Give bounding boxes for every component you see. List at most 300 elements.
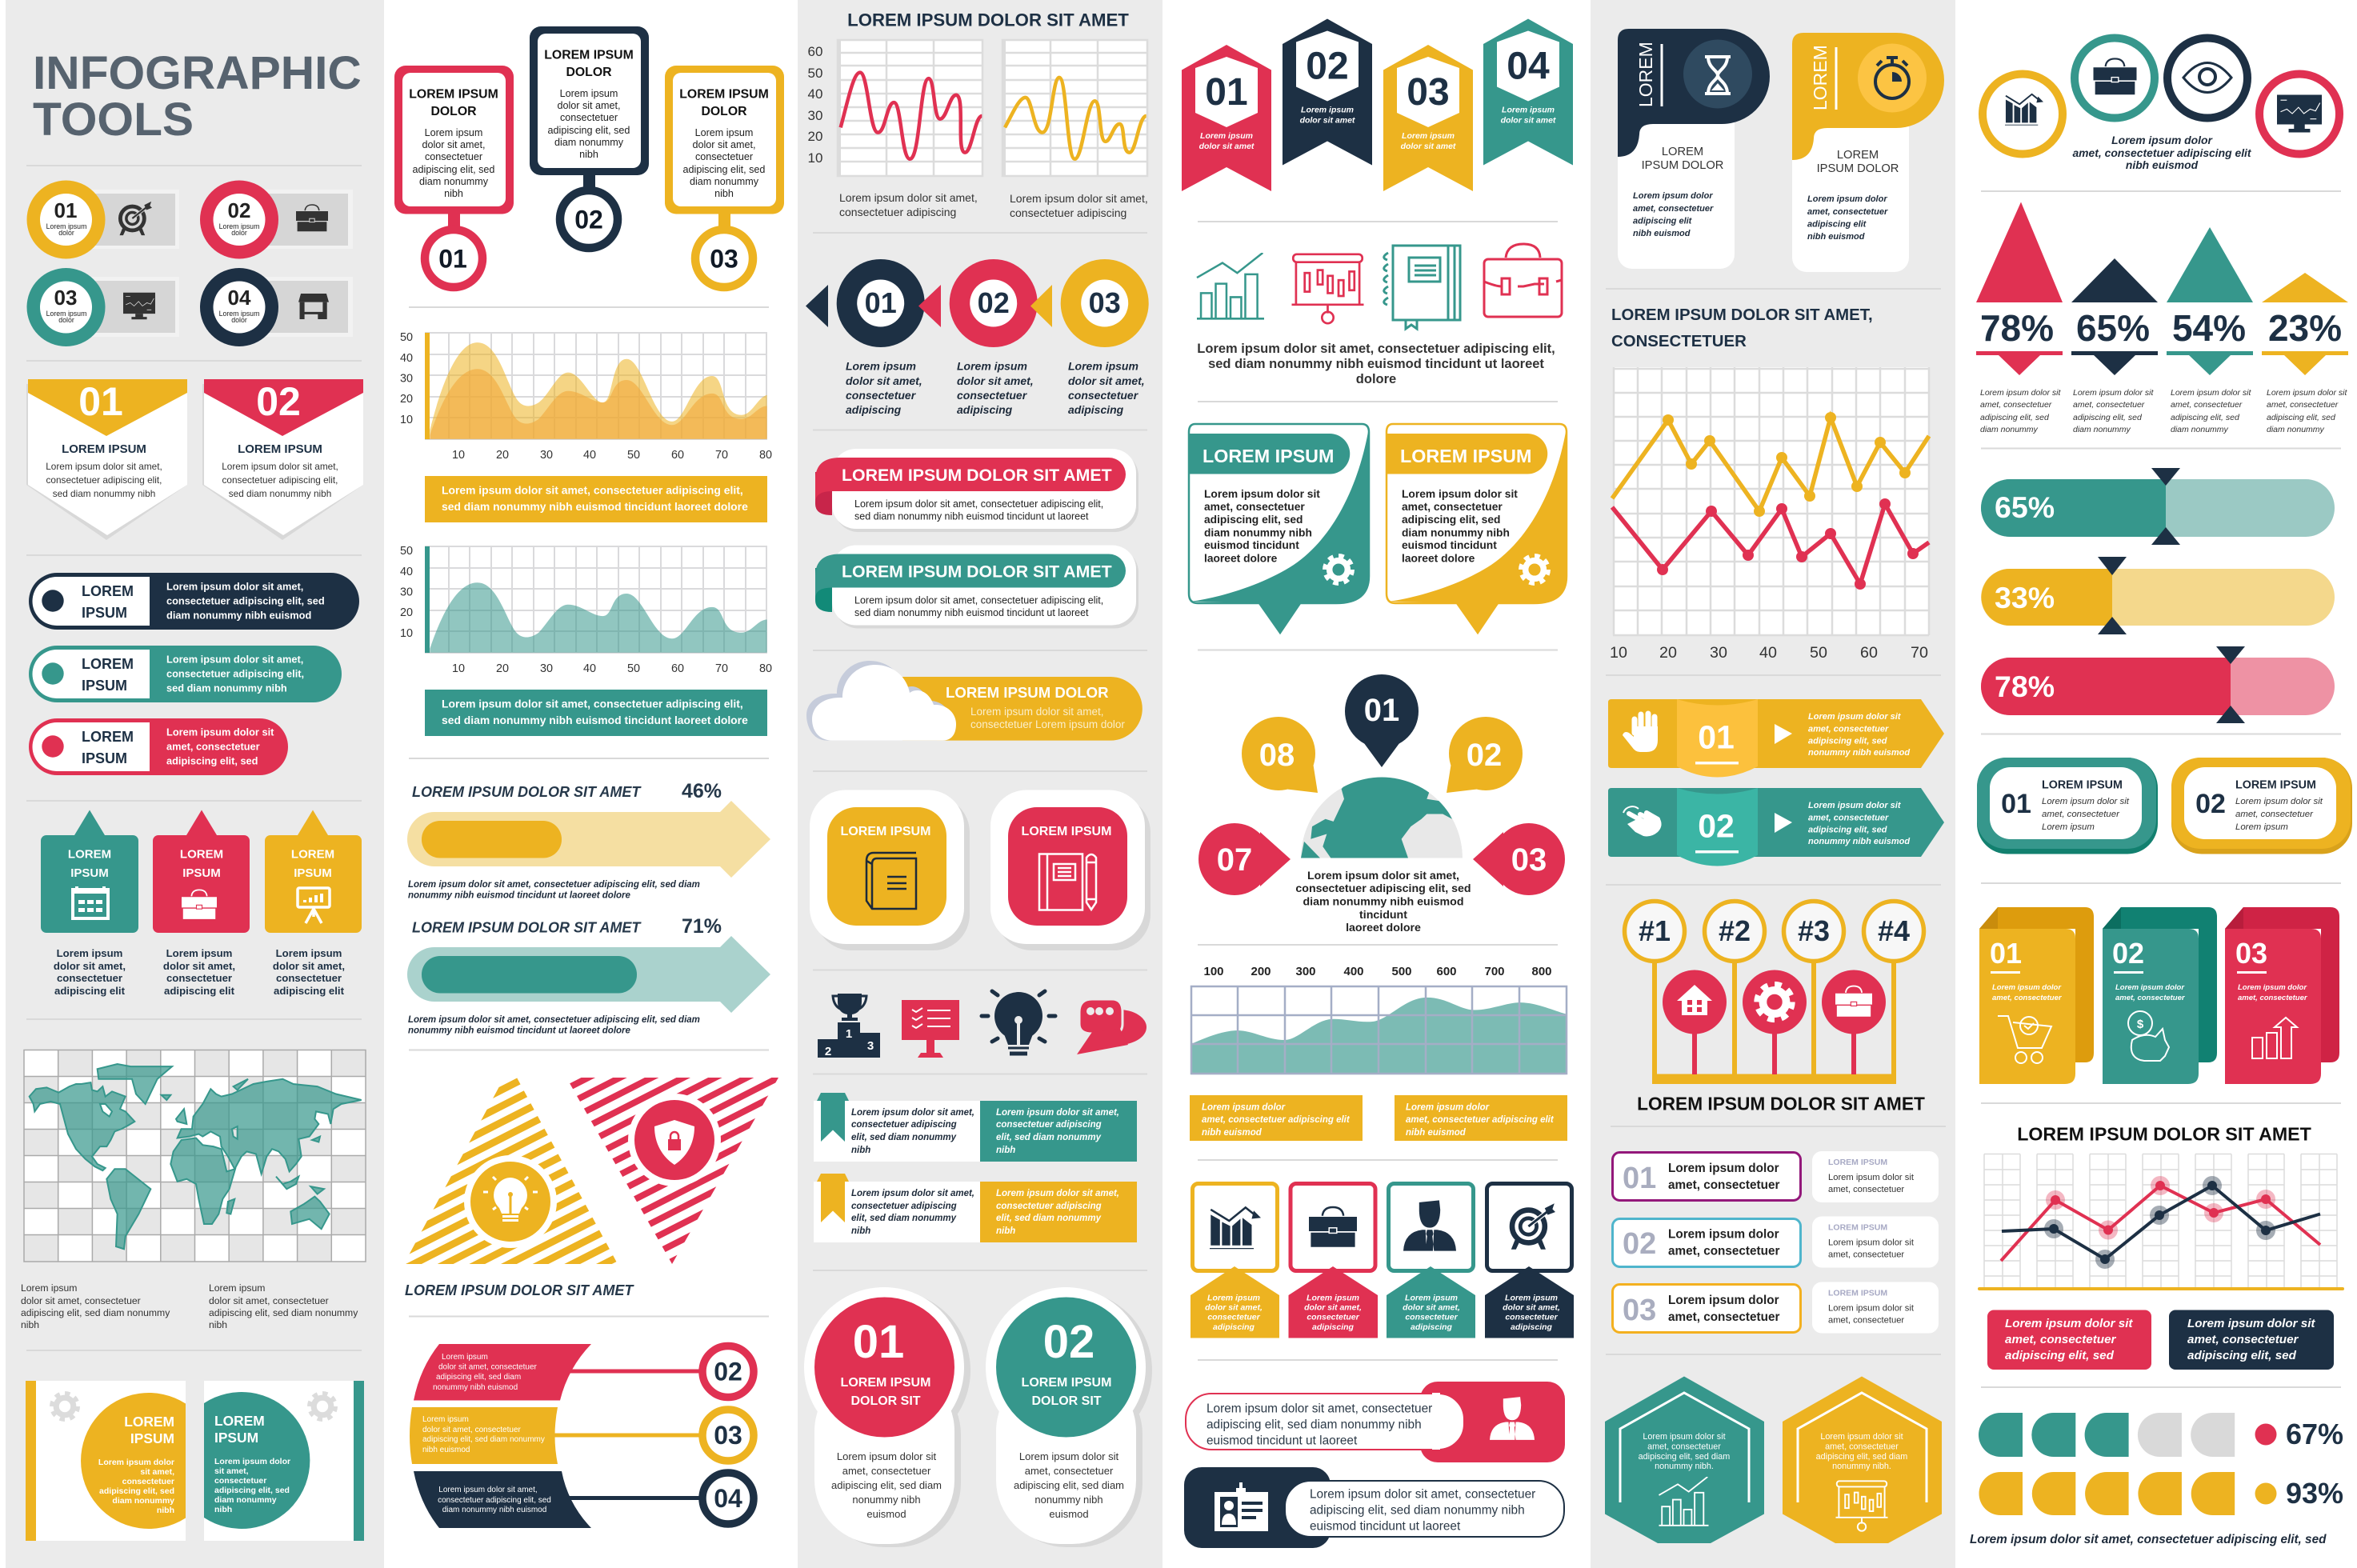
tag card teal: Lorem ipsum <box>57 947 122 959</box>
bookmark row teal: elit, sed diam nonummy <box>996 1133 1102 1142</box>
icon row paragraph: dolore <box>1356 372 1396 386</box>
list row 02 <box>1613 1216 1939 1267</box>
ribbon card teal: LOREM IPSUM DOLOR SIT AMET <box>842 562 1112 581</box>
area chart gold: 50 <box>400 331 413 344</box>
icon: gear <box>310 1394 335 1419</box>
tag card teal: adipiscing elit <box>54 985 126 997</box>
round badge card 02: amet, consectetuer <box>1025 1465 1114 1477</box>
pin card 03: diam nonummy <box>690 176 759 187</box>
folder card red: amet, consectetuer <box>2238 994 2308 1002</box>
hexagon gold: Lorem ipsum dolor sit <box>1820 1432 1903 1442</box>
shield card 02: Lorem ipsum dolor sit amet, <box>222 461 338 472</box>
bookmark row gold: nibh <box>851 1226 870 1236</box>
map caption left: Lorem ipsum <box>21 1282 77 1294</box>
pin card 03: consectetuer <box>695 151 753 162</box>
icon: growth bars <box>2252 1018 2297 1058</box>
pill navy: IPSUM <box>82 605 127 621</box>
speech box gold: euismod tincidunt <box>1402 539 1497 551</box>
area chart teal: 20 <box>400 606 413 619</box>
round badge card 01: amet, consectetuer <box>842 1465 931 1477</box>
badge 04 <box>702 1473 754 1524</box>
line chart red <box>837 39 983 177</box>
pictogram row 67% <box>1979 1413 2343 1457</box>
icon card teal: adipiscing <box>1411 1322 1453 1332</box>
tag card gold: dolor sit amet, <box>273 960 345 972</box>
hexagon teal: adipiscing elit, sed diam <box>1639 1452 1730 1462</box>
badge 02: 02 <box>714 1357 742 1386</box>
y axis labels: 30 <box>808 108 822 123</box>
icon card navy: dolor sit amet, <box>1503 1302 1560 1312</box>
numbered circle tag 02 <box>200 181 353 259</box>
icon: bars <box>1659 1477 1709 1526</box>
cloud banner: LOREM IPSUM DOLOR <box>946 684 1109 701</box>
icon: id card <box>1215 1482 1268 1531</box>
round badge card 02 <box>986 1287 1152 1547</box>
step circle 02 <box>918 259 1038 347</box>
icon: shop <box>298 294 329 319</box>
pill navy: diam nonummy nibh euismod <box>166 610 311 621</box>
arrow strip gold: nonummy nibh euismod <box>1808 748 1910 758</box>
striped triangle gold with bulb <box>404 1078 618 1264</box>
dual series grid chart <box>1978 1154 2344 1290</box>
line chart gold <box>1002 39 1148 177</box>
pin card 01: 01 <box>438 245 467 274</box>
icon: briefcase <box>182 890 217 919</box>
timer card gold: adipiscing elit <box>1807 219 1867 229</box>
speech box teal: amet, consectetuer <box>1204 501 1305 513</box>
circle card gold <box>26 1381 186 1541</box>
hexagon gold: amet, consectetuer <box>1825 1442 1899 1451</box>
arrow progress 71%: nonummy nibh euismod tincidunt ut laoreet dolore <box>408 1026 631 1035</box>
icon: trophy podium: 2 <box>825 1045 831 1058</box>
timer card navy: Lorem ipsum dolor <box>1633 191 1713 201</box>
list row 01: amet, consectetuer <box>1828 1185 1904 1194</box>
icon tile red: LOREM IPSUM <box>1022 825 1111 838</box>
circle card teal: diam nonummy <box>214 1495 277 1505</box>
tag card teal: LOREM <box>68 848 111 861</box>
speech box teal: LOREM IPSUM <box>1203 446 1334 466</box>
percent stat 65: adipiscing elit, sed <box>2073 413 2143 422</box>
icon: target <box>120 202 152 235</box>
map land masses <box>30 1064 362 1249</box>
icon: trophy podium: 1 <box>846 1027 852 1041</box>
cloud banner: Lorem ipsum dolor sit amet, <box>970 706 1104 718</box>
hash #4: #4 <box>1878 914 1910 947</box>
area chart gold: 10 <box>400 414 413 426</box>
double line chart: 30 <box>1710 644 1727 662</box>
list row 02: LOREM IPSUM <box>1828 1222 1887 1232</box>
percent stat 78: adipiscing elit, sed <box>1980 413 2050 422</box>
note red: adipiscing elit, sed <box>2005 1349 2115 1362</box>
numbered circle tag 04: Lorem ipsum <box>219 310 259 318</box>
column 6 <box>1970 38 2352 1546</box>
area chart gold: 10 <box>452 449 465 462</box>
percent stat 78: Lorem ipsum dolor sit <box>1980 388 2061 398</box>
pin 02 <box>1447 717 1523 793</box>
pill teal <box>29 646 342 702</box>
list row 03: Lorem ipsum dolor <box>1668 1294 1779 1307</box>
pin card 02: dolor sit amet, <box>557 100 621 111</box>
pin card 02: LOREM IPSUM <box>544 48 634 62</box>
percent stat 54: diam nonummy <box>2171 425 2229 434</box>
hexagon ribbon 01: Lorem ipsum <box>1200 131 1253 141</box>
note red <box>1987 1310 2151 1370</box>
caption box left: amet, consectetuer adipiscing elit <box>1202 1115 1351 1125</box>
timer card gold <box>1792 33 1944 272</box>
speech box gold: diam nonummy nibh <box>1402 526 1510 539</box>
numbered circle tag 03 <box>27 268 179 346</box>
pin 07: 07 <box>1217 842 1252 878</box>
timer card navy: nibh euismod <box>1633 229 1691 238</box>
list row 03: amet, consectetuer <box>1828 1315 1904 1325</box>
tree heading: LOREM IPSUM DOLOR SIT AMET <box>1637 1093 1925 1114</box>
pin 03 <box>1473 823 1565 895</box>
bookmark row gold: elit, sed diam nonummy <box>851 1214 957 1223</box>
circle card teal: sit amet, <box>214 1466 249 1476</box>
map caption left: dolor sit amet, consectetuer <box>21 1295 141 1306</box>
shield card 02: consectetuer adipiscing elit, <box>222 474 338 486</box>
list row 01: LOREM IPSUM <box>1828 1158 1887 1167</box>
segment navy: Lorem ipsum dolor sit amet, <box>438 1486 538 1494</box>
numbered circle tag 04: dolor <box>231 316 247 324</box>
round badge card 01: LOREM IPSUM <box>841 1376 930 1390</box>
globe caption: consectetuer adipiscing elit, sed <box>1295 882 1471 895</box>
quote card red <box>1186 1382 1565 1462</box>
area chart teal: 80 <box>759 662 772 675</box>
shield card 01: LOREM IPSUM <box>62 442 146 456</box>
timer card gold: amet, consectetuer <box>1807 207 1888 217</box>
list row 01: Lorem ipsum dolor <box>1668 1162 1779 1175</box>
quote card navy: euismod tincidunt ut laoreet <box>1310 1520 1461 1533</box>
area chart teal: 70 <box>715 662 728 675</box>
numbered circle tag 04: 04 <box>228 286 251 310</box>
pin card 03: dolor sit amet, <box>692 139 756 150</box>
quote card navy: adipiscing elit, sed diam nonummy nibh <box>1310 1504 1525 1517</box>
timer card navy: LOREM <box>1635 42 1656 107</box>
icon card gold: Lorem ipsum <box>1207 1293 1260 1302</box>
rounded box teal <box>1977 758 2158 854</box>
quote card red: euismod tincidunt ut laoreet <box>1207 1434 1358 1448</box>
globe caption: diam nonummy nibh euismod <box>1303 896 1464 909</box>
pin card 03: adipiscing elit, sed <box>683 164 765 175</box>
list row 01: Lorem ipsum dolor sit <box>1828 1173 1915 1182</box>
heading: LOREM IPSUM DOLOR SIT AMET <box>847 10 1129 30</box>
map caption right: Lorem ipsum <box>209 1282 265 1294</box>
segment red: dolor sit amet, consectetuer <box>438 1363 538 1371</box>
numbered circle tag 01 <box>27 181 179 259</box>
pin card 03: Lorem ipsum <box>695 127 753 138</box>
icon card gold <box>1191 1184 1279 1338</box>
pin card 03 <box>665 66 784 287</box>
icon card gold: dolor sit amet, <box>1205 1302 1263 1312</box>
speech box gold: laoreet dolore <box>1402 552 1475 565</box>
icon ring red monitor <box>2259 74 2339 154</box>
area chart gold: 20 <box>496 449 509 462</box>
caption bar gold <box>425 476 767 522</box>
speech box gold: amet, consectetuer <box>1402 501 1503 513</box>
arrow progress 46%: LOREM IPSUM DOLOR SIT AMET <box>412 784 642 800</box>
hash #4 <box>1864 901 1923 962</box>
hexagon teal: Lorem ipsum dolor sit <box>1643 1432 1726 1442</box>
area chart wide: 200 <box>1251 965 1271 978</box>
icon: line notebook <box>1384 246 1460 329</box>
area chart teal: 40 <box>400 566 413 578</box>
circle card gold: Lorem ipsum dolor <box>98 1458 174 1467</box>
folder card gold: Lorem ipsum dolor <box>1992 983 2062 992</box>
tag card teal: dolor sit amet, <box>54 960 126 972</box>
circle card gold: IPSUM <box>130 1430 174 1446</box>
hash #1 <box>1624 901 1685 962</box>
column 2 <box>394 26 784 1528</box>
arrow strip teal: amet, consectetuer <box>1808 813 1889 822</box>
hexagon ribbon 03 <box>1383 45 1473 191</box>
pin 08: 08 <box>1259 738 1295 773</box>
icon card teal: Lorem ipsum <box>1405 1293 1458 1302</box>
area chart gold: 80 <box>759 449 772 462</box>
map caption right: adipiscing elit, sed diam nonummy <box>209 1307 358 1318</box>
navy series <box>2002 1176 2320 1269</box>
quote card navy <box>1184 1467 1564 1548</box>
hash #2: #2 <box>1719 914 1751 947</box>
list row 01: 01 <box>1623 1162 1656 1195</box>
icon card red <box>1288 1184 1378 1338</box>
step captions: Lorem ipsum <box>846 360 916 373</box>
icon tile gold: LOREM IPSUM <box>841 825 930 838</box>
cloud banner: consectetuer Lorem ipsum dolor <box>970 718 1125 730</box>
ribbon card red <box>815 449 1138 532</box>
pin card 03: LOREM IPSUM <box>679 88 769 101</box>
bookmark row gold: elit, sed diam nonummy <box>996 1214 1102 1223</box>
arrow strip gold: adipiscing elit, sed <box>1808 736 1887 746</box>
tag card red: dolor sit amet, <box>163 960 235 972</box>
bookmark row teal: Lorem ipsum dolor sit amet, <box>996 1108 1119 1118</box>
area chart teal: 50 <box>400 545 413 558</box>
pin card 01: LOREM IPSUM <box>409 88 498 101</box>
speech box teal: laoreet dolore <box>1204 552 1278 565</box>
pictogram row 67%: 67% <box>2286 1418 2343 1450</box>
round badge card 02: adipiscing elit, sed diam <box>1014 1479 1124 1491</box>
round badge card 01: DOLOR SIT <box>850 1394 921 1408</box>
round badge card 01: adipiscing elit, sed diam <box>831 1479 942 1491</box>
pin card 02: diam nonummy <box>554 137 624 148</box>
arrow progress 46%: Lorem ipsum dolor sit amet, consectetuer adipiscing elit, sed diam <box>408 880 700 890</box>
progress bar 78%: 78% <box>1995 670 2055 703</box>
shield card 01: sed diam nonummy nibh <box>53 488 155 499</box>
speech box teal: diam nonummy nibh <box>1204 526 1312 539</box>
pin card 02: consectetuer <box>560 112 618 123</box>
hexagon ribbon 01 <box>1182 45 1271 191</box>
note navy: adipiscing elit, sed <box>2187 1349 2297 1362</box>
heading: LOREM IPSUM DOLOR SIT AMET, <box>1611 306 1873 324</box>
ribbon card teal <box>815 546 1138 629</box>
icon: gear <box>1325 556 1352 583</box>
badge 02 <box>702 1346 754 1397</box>
percent stat 23: Lorem ipsum dolor sit <box>2267 388 2347 398</box>
icon card teal <box>1387 1184 1475 1338</box>
list row 01 <box>1613 1151 1939 1202</box>
folder card red <box>2225 907 2339 1084</box>
segment red: adipiscing elit, sed diam <box>436 1373 521 1382</box>
area chart teal <box>400 545 772 675</box>
numbered circle tag 04 <box>200 268 353 346</box>
pill teal: IPSUM <box>82 678 127 694</box>
chart captions: consectetuer adipiscing <box>839 206 956 218</box>
y axis labels: 50 <box>808 66 822 81</box>
pin card 03: nibh <box>714 188 734 199</box>
area chart teal: 40 <box>583 662 596 675</box>
step captions: dolor sit amet, <box>846 374 922 387</box>
pictogram row 93% <box>1979 1472 2343 1515</box>
hexagon gold: adipiscing elit, sed diam <box>1816 1452 1907 1462</box>
step captions: dolor sit amet, <box>1068 374 1145 387</box>
rounded box gold: LOREM IPSUM <box>2235 779 2316 792</box>
rounded box teal: Lorem ipsum <box>2042 822 2095 832</box>
icon: presentation <box>298 888 330 923</box>
column 3 <box>804 10 1152 1547</box>
area chart teal: 20 <box>496 662 509 675</box>
area chart teal: 10 <box>452 662 465 675</box>
tag card red <box>153 810 250 997</box>
pictogram row 93%: 93% <box>2286 1477 2343 1510</box>
rounded box teal: Lorem ipsum dolor sit <box>2042 797 2130 806</box>
rounded box gold: Lorem ipsum dolor sit <box>2235 797 2323 806</box>
step captions: Lorem ipsum <box>1068 360 1138 373</box>
shield card 02: LOREM IPSUM <box>238 442 322 456</box>
rounded box teal: 01 <box>2001 789 2031 819</box>
numbered circle tag 01: dolor <box>58 229 74 237</box>
round badge card 01: nonummy nibh <box>852 1494 921 1506</box>
tag card teal: consectetuer <box>57 972 122 984</box>
area chart teal: 30 <box>540 662 553 675</box>
round badge card 02: DOLOR SIT <box>1031 1394 1102 1408</box>
circle card gold: diam nonummy <box>112 1496 174 1506</box>
area chart gold: 30 <box>400 373 413 386</box>
segment gold: nibh euismod <box>422 1446 470 1454</box>
area chart wide <box>1191 965 1567 1074</box>
numbered circle tag 03: 03 <box>54 286 77 310</box>
step circle 03: 03 <box>1089 286 1121 319</box>
icon row paragraph: Lorem ipsum dolor sit amet, consectetuer adipiscing elit, <box>1197 342 1555 356</box>
tag card teal <box>41 810 138 997</box>
pill red: LOREM <box>82 729 134 745</box>
progress bar 78% <box>1981 646 2335 723</box>
caption bar gold: sed diam nonummy nibh euismod tincidunt laoreet dolore <box>442 500 748 513</box>
globe caption: laoreet dolore <box>1346 922 1421 934</box>
icon card navy: Lorem ipsum <box>1505 1293 1558 1302</box>
arrow progress 71%: LOREM IPSUM DOLOR SIT AMET <box>412 920 642 936</box>
icon tile gold <box>810 790 970 950</box>
area chart gold: 40 <box>400 352 413 365</box>
icon: house <box>1663 970 1727 1034</box>
numbered circle tag 02: Lorem ipsum <box>219 222 259 230</box>
step captions: adipiscing <box>957 403 1013 416</box>
pin 01: 01 <box>1364 693 1399 728</box>
heading: CONSECTETUER <box>1611 333 1747 350</box>
arrow progress 46%: nonummy nibh euismod tincidunt ut laoreet dolore <box>408 891 631 901</box>
bookmark row teal: consectetuer adipiscing <box>851 1120 957 1130</box>
progress bar 65% <box>1981 468 2335 545</box>
ribbon card red: LOREM IPSUM DOLOR SIT AMET <box>842 466 1112 485</box>
list row 03: amet, consectetuer <box>1668 1310 1779 1324</box>
caption box left: nibh euismod <box>1202 1128 1263 1138</box>
area chart wide: 700 <box>1484 965 1505 978</box>
title: INFOGRAPHIC <box>33 47 362 99</box>
note red: amet, consectetuer <box>2005 1333 2117 1346</box>
hexagon ribbon 02: Lorem ipsum <box>1301 106 1354 115</box>
pill navy: LOREM <box>82 583 134 599</box>
rounded box gold: amet, consectetuer <box>2235 810 2314 819</box>
timer card gold: IPSUM DOLOR <box>1817 162 1899 175</box>
circle card teal: consectetuer <box>214 1476 266 1486</box>
icon: toolbox <box>1822 970 1886 1034</box>
percent stat 23: 23% <box>2268 307 2342 349</box>
hash #1: #1 <box>1639 914 1671 947</box>
pin card 02: adipiscing elit, sed <box>548 125 630 136</box>
gold series <box>1612 412 1929 517</box>
pill navy <box>29 573 359 630</box>
icon: businessman <box>1403 1200 1456 1251</box>
y axis labels: 10 <box>808 150 822 166</box>
segment gold: Lorem ipsum <box>422 1415 469 1424</box>
area chart wide: 800 <box>1531 965 1552 978</box>
pill teal: Lorem ipsum dolor sit amet, <box>166 653 303 666</box>
arrow progress 46% <box>407 780 770 901</box>
speech box teal: euismod tincidunt <box>1204 539 1299 551</box>
area chart teal: 10 <box>400 627 413 640</box>
icon: stopwatch <box>1875 58 1909 98</box>
bookmark row gold: Lorem ipsum dolor sit amet, <box>851 1189 974 1198</box>
icon card navy: consectetuer <box>1505 1312 1559 1322</box>
circle card gold: nibh <box>157 1506 174 1515</box>
step captions: consectetuer <box>846 389 917 402</box>
icon: trophy podium <box>818 994 880 1058</box>
list row 03 <box>1613 1282 1939 1333</box>
hexagon ribbon 03: 03 <box>1407 71 1450 114</box>
bookmark row teal: nibh <box>851 1146 870 1155</box>
pill navy: Lorem ipsum dolor sit amet, <box>166 581 303 592</box>
percent stat 78: amet, consectetuer <box>1980 400 2052 410</box>
hexagon gold: nonummy nibh. <box>1832 1462 1891 1471</box>
icon card gold: consectetuer <box>1207 1312 1261 1322</box>
round badge card 01: euismod <box>866 1508 906 1520</box>
pill red <box>29 718 288 775</box>
icon card teal: consectetuer <box>1405 1312 1459 1322</box>
list row 01: amet, consectetuer <box>1668 1178 1779 1192</box>
round badge card 01: Lorem ipsum dolor sit <box>837 1450 937 1462</box>
icon: piggy bank <box>2128 1011 2169 1061</box>
rounded box gold <box>2171 758 2352 854</box>
step captions: adipiscing <box>1068 403 1124 416</box>
speech box teal: adipiscing elit, sed <box>1204 514 1303 526</box>
footer caption: Lorem ipsum dolor sit amet, consectetuer adipiscing elit, sed <box>1970 1533 2327 1546</box>
percent stat 23 <box>2262 273 2348 434</box>
icon card red: adipiscing <box>1312 1322 1355 1332</box>
hexagon teal: nonummy nibh. <box>1655 1462 1714 1471</box>
list row 03: 03 <box>1623 1294 1656 1327</box>
quote card red: adipiscing elit, sed diam nonummy nibh <box>1207 1418 1422 1432</box>
pill red: adipiscing elit, sed <box>166 755 258 766</box>
segmented list <box>410 1344 754 1528</box>
badge 04: 04 <box>714 1484 742 1513</box>
map caption right: nibh <box>209 1319 227 1330</box>
list row 03: LOREM IPSUM <box>1828 1288 1887 1298</box>
caption box right: nibh euismod <box>1406 1128 1467 1138</box>
round badge card 02: 02 <box>1043 1316 1094 1368</box>
round badge card 01 <box>804 1287 970 1547</box>
list row 02: amet, consectetuer <box>1668 1245 1779 1258</box>
circle card teal: adipiscing elit, sed <box>214 1486 290 1495</box>
icon card red: Lorem ipsum <box>1307 1293 1359 1302</box>
